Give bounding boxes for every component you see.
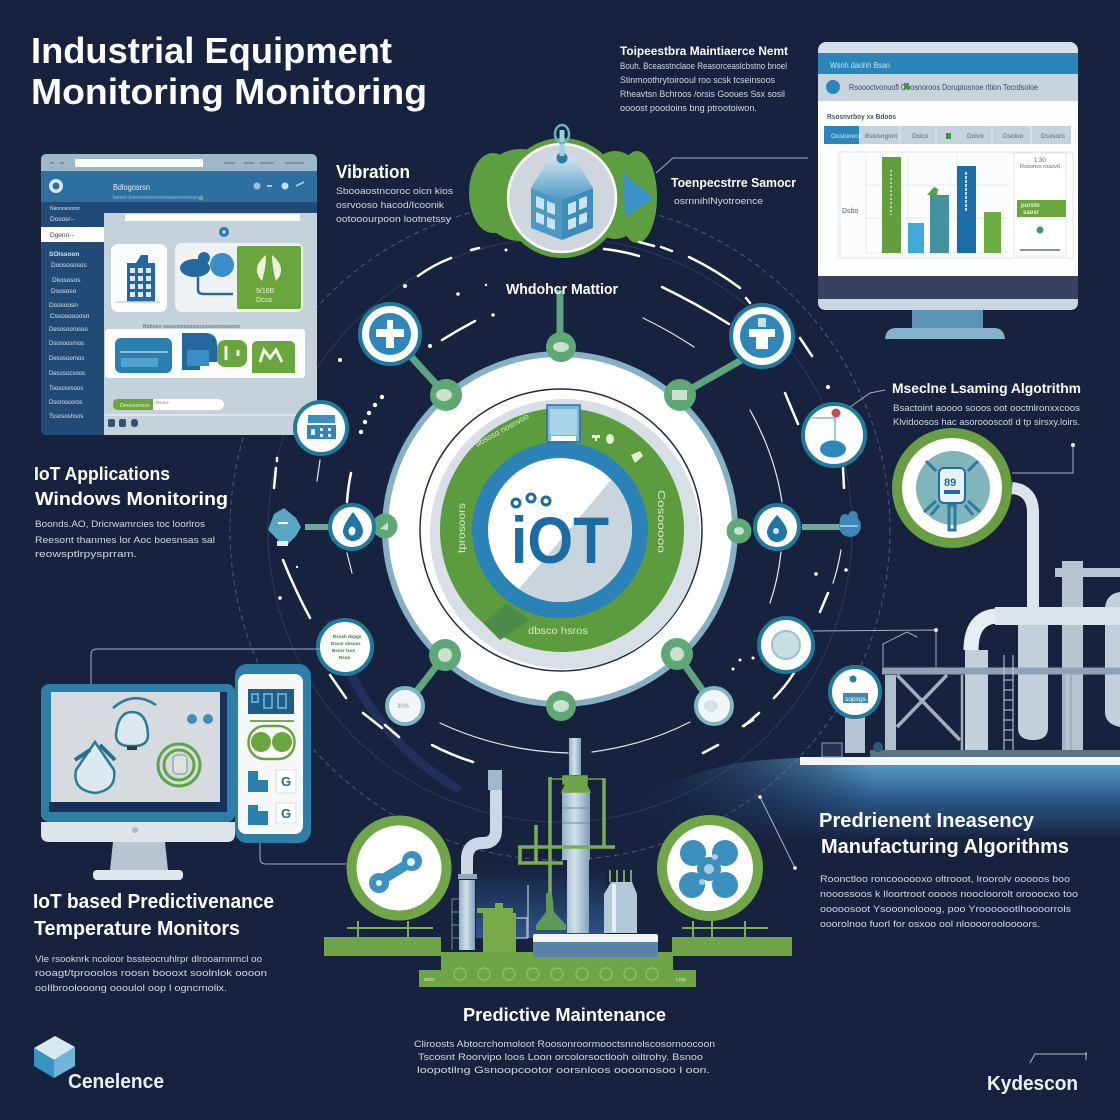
green base: soos: [424, 977, 435, 983]
icon: text badge left: [318, 620, 372, 674]
monitor body: [818, 42, 1078, 310]
text block: temperature maintenance: [620, 44, 788, 114]
text block: temperature maintenance: Rheavtsn Bchroos /orsis Gooues Ssx sosil: [620, 89, 785, 100]
text block: temperature maintenance: Stinmoothrytoirooul roo scsk tcseinsoos: [620, 75, 775, 86]
diagonal shade: [483, 603, 530, 640]
arrowhead: [1071, 443, 1075, 447]
small chip on ring: [547, 405, 580, 442]
icon: server circle: [295, 402, 347, 454]
ring nodes: [372, 332, 752, 721]
green frame: [518, 777, 615, 893]
card: building: [111, 244, 167, 312]
icon: plus valve left: [360, 304, 420, 364]
camera dot: [132, 827, 138, 833]
stand: [93, 842, 183, 880]
icon: text badge left: Rsoo: [339, 655, 351, 660]
text block: iot predictive: Vle rsooknrk ncoloor bssteocruhlrpr dlrooarnnrncl oo: [35, 954, 262, 965]
text block: machine learning: Mseclne Lsaming Algotrithm: [892, 380, 1081, 396]
riser: [965, 650, 988, 750]
outer ring: [385, 354, 735, 704]
icon: badge on post: [830, 667, 880, 753]
sidebar: Dkososos: [52, 277, 81, 284]
text block: iot applications: Windows Monitoring: [35, 489, 228, 509]
backdrop glow: [476, 868, 606, 938]
signal dots: [512, 494, 550, 507]
text block: predictive maintenance: loopotilng Gsnoopcootor oorsnloos oooonosoo l oon.: [417, 1065, 710, 1076]
icon: green gauge: [158, 744, 200, 786]
orbit dots: [278, 248, 848, 670]
toolbar: [41, 154, 317, 171]
status pill: Dsoro-: [156, 400, 170, 405]
sidebar: [41, 206, 104, 435]
central hub: [385, 354, 735, 704]
connectors: spokes: [305, 290, 842, 700]
sensor box: [531, 157, 593, 240]
text block: manufacturing algorithms: nooossoos k lloortroot oooos noocloorolt orooocxo too: [820, 889, 1078, 900]
panel: desktop and tablet left: [41, 649, 346, 880]
text block: machine learning: [892, 380, 1081, 428]
tank middle: [1018, 622, 1048, 740]
text block: manufacturing algorithms: [819, 810, 1078, 930]
icon: text badge left: Rsosh dspgs: [333, 634, 362, 639]
green disc: [440, 408, 684, 652]
icon: bulb: [113, 698, 156, 750]
connector: sensor to right monitor: [656, 158, 808, 173]
column bands: [562, 808, 590, 823]
text block: iot predictive: ooIlbroolooong oooulol oop l ogncrnolix.: [35, 983, 227, 994]
icon: small globe left: 30%: [397, 704, 410, 710]
text block: vibration: Sbooaostncoroc oicn kios: [336, 186, 453, 197]
text block: iot applications: [34, 464, 228, 560]
icon: top sensor: [469, 125, 657, 258]
green base: [419, 952, 696, 987]
card: cloud and leaf: Dcca: [256, 297, 272, 304]
main pipe: [995, 607, 1120, 625]
top strip: [125, 214, 300, 237]
sidebar: SOissoon: [49, 251, 79, 258]
sidebar: Tsososvsoos: [49, 386, 83, 392]
icon: small globe left: [387, 688, 423, 724]
connector: algorithm callout: [1012, 446, 1073, 473]
green base: Lrso: [676, 977, 686, 983]
icon: small globe right: [696, 688, 732, 724]
tablet: G: [281, 774, 291, 789]
header: [41, 171, 317, 213]
green collar: [548, 776, 606, 792]
text block: iot predictive: [33, 891, 274, 994]
info row: [818, 74, 1078, 101]
text block: machine learning: Klvidoosos hac asoroooscotl d tp sirsxy.loirs.: [893, 417, 1080, 428]
logo text: cenelence: Cenelence: [68, 1071, 164, 1093]
text block: manufacturing algorithms: Manufacturing Algorithms: [821, 836, 1069, 858]
stand: [885, 310, 1005, 339]
tall column: [1055, 561, 1120, 751]
icon: gauge right: [759, 618, 813, 672]
tabs: Dxlco: [912, 133, 929, 140]
blue triangle: [623, 173, 654, 217]
icon: plus valve right: [731, 305, 793, 367]
left pipe: [458, 770, 502, 950]
green valve: [536, 893, 566, 930]
header bar: Wsnh daohh Bsan: [830, 61, 890, 70]
info row: Rsoooctvonuofl Coosnoroos Doruptosnoe rltion Tocrdsoloe: [849, 83, 1038, 92]
side card: saosr: [1023, 210, 1040, 216]
icon: blue device left: [268, 508, 301, 546]
status pill: Deososnoos: [120, 403, 150, 409]
logo text: kydescon: Kydescon: [987, 1073, 1078, 1095]
icon: drop right: [755, 505, 799, 549]
tabs: Dsoloo: [1003, 133, 1024, 140]
icon: hood: [75, 742, 115, 793]
side card: pursto: [1021, 203, 1040, 209]
card: cloud and leaf: [175, 243, 303, 312]
left green platform: [324, 937, 441, 956]
pipe from circle: [1012, 488, 1033, 607]
sidebar: Desosocsoos: [49, 371, 85, 377]
tablet: G: [281, 806, 291, 821]
title: Industrial Equipment: [31, 30, 392, 71]
icon: wrench circle: [352, 820, 446, 916]
header: Bdlogosrsn: [113, 183, 150, 192]
grey tank: [604, 870, 637, 933]
text block: manufacturing algorithms: ooooosoot Ysooonolooog, poo Yrooooootlhoooorrols: [820, 904, 1071, 915]
text block: temperature maintenance: Toipeestbra Maintiaerce Nemt: [620, 44, 788, 58]
footer icons: [108, 419, 138, 427]
tabs: Bslosngorn: [865, 133, 898, 140]
icon: blue device right: [839, 511, 861, 537]
tabs: Ooslonoos: [831, 133, 863, 140]
base strip: [800, 742, 1120, 765]
dark band: [49, 692, 227, 812]
status pill: [105, 399, 317, 415]
icon: badge on post: sopsgs: [845, 697, 866, 703]
tablet: [235, 664, 311, 843]
connector: machine learning: [850, 390, 885, 407]
label: window monitor: Whdohcr Mattior: [506, 281, 618, 298]
text block: iot predictive: IoT based Predictivenance: [33, 891, 274, 913]
sidebar: Dsoroscoros: [49, 400, 83, 406]
panel: factory right: [800, 443, 1120, 765]
elbow: [971, 616, 996, 650]
sidebar: Dososr--: [50, 216, 75, 223]
tabs: Dolvo: [967, 133, 984, 140]
text block: machine learning: Bsactoint aoooo sooos oot ooctnlronxxcoos: [893, 403, 1080, 414]
text block: temperature sensor: [671, 175, 796, 207]
diagonal highlight: [519, 480, 632, 602]
text block: predictive maintenance: Predictive Maintenance: [463, 1005, 666, 1025]
text block: temperature maintenance: oooost poodoins bng ptrootoiwon.: [620, 103, 757, 114]
title: [31, 30, 427, 112]
sidebar: Dsososo: [51, 288, 77, 295]
ring labels: dbsoso nosnvoo: [474, 412, 531, 449]
side card: [1014, 153, 1066, 256]
text block: predictive maintenance: Tscosnt Roorvipo loos Loon orcolorsoctlooh oiltrohy. Bsnoo: [418, 1052, 703, 1063]
text block: iot predictive: rooagt/tprooolos roosn boooxt soolnlok oooon: [35, 968, 267, 979]
wire top: [91, 649, 320, 684]
text block: manufacturing algorithms: Roonctloo roncoooooxo oltrooot, lroorolv ooooos boo: [820, 874, 1070, 885]
small glyphs on disc: [592, 434, 643, 463]
sidebar: Doosososos: [51, 262, 88, 269]
header bar: [818, 53, 1078, 74]
header: bsnoo loooonsnoooooonaoooooooon: [113, 195, 198, 201]
ring labels: [457, 412, 666, 637]
sidebar: Cssosoooosn: [50, 313, 90, 320]
wave: blue floor: [682, 758, 1120, 836]
content: [818, 101, 1078, 276]
platform rails: [347, 921, 768, 937]
hanger: [555, 125, 569, 164]
panel: browser dashboard left: [41, 154, 317, 435]
bar chart: Dsbo: [842, 208, 858, 215]
bar chart: [838, 152, 1073, 258]
side card: Rosonvs roasvd: [1020, 164, 1060, 170]
sidebar: Dsosoosn: [49, 302, 78, 309]
text block: predictive maintenance: [414, 1005, 715, 1076]
chin: [41, 822, 235, 842]
wire dot: [934, 628, 938, 632]
text block: manufacturing algorithms: Predrienent Ineasency: [819, 810, 1035, 832]
indicator dots: [187, 714, 213, 724]
text block: vibration: Vibration: [336, 162, 410, 182]
card: cloud and leaf: 9/16B: [256, 288, 275, 295]
icon: drop left: [330, 505, 374, 549]
monitor bezel: [41, 684, 235, 822]
text block: iot predictive: Temperature Monitors: [34, 918, 240, 940]
chin: [818, 299, 1078, 310]
icon: algorithm circle: [897, 433, 1007, 543]
white slab: [533, 934, 658, 957]
text block: temperature maintenance: Bouh. Bceasstnclaoe Reasorceaslcbstno bnoel: [620, 61, 787, 72]
IoT wordmark: iOT: [511, 503, 609, 577]
wire bottom: [260, 843, 346, 864]
text block: temperature sensor: osrnnihlNyotroence: [674, 196, 763, 207]
ring labels: dbsco hsros: [528, 626, 588, 637]
small ladder: [452, 899, 459, 950]
sidebar: Desosoorosoo: [49, 327, 88, 333]
text block: iot applications: reowsptlrpysprram.: [35, 549, 137, 560]
text block: vibration: ootooourpoon lootnetssy: [336, 214, 451, 225]
device strip: [105, 329, 305, 378]
sidebar: Desosoornos: [49, 356, 84, 362]
tabs: Dsvsoro: [1041, 133, 1065, 140]
dark band: [818, 276, 1078, 299]
text block: temperature sensor: Toenpecstrre Samocr: [671, 175, 796, 190]
panel: central plant: [324, 738, 792, 987]
title: Monitoring Monitoring: [31, 71, 427, 112]
text block: vibration: osrvooso hacod/Icoonik: [336, 200, 444, 211]
tank right: [1105, 592, 1120, 727]
icon: algorithm circle: 89: [944, 477, 956, 489]
thin ring: [420, 389, 702, 671]
upper pipe: [569, 738, 581, 775]
sidebar: Dgenn--: [50, 232, 73, 239]
orbit dashes: [274, 242, 844, 762]
main column: [562, 792, 590, 933]
panel: dashboard monitor top right: [818, 42, 1078, 339]
section caption: Bsboso osososososososososososoooo: [143, 324, 240, 330]
corner wire: [1030, 1052, 1087, 1063]
text block: vibration: [336, 162, 453, 225]
back rail: [516, 885, 528, 938]
tabs: [824, 126, 1071, 144]
sidebar: Nannosoooor: [50, 206, 80, 212]
connector: manufacturing callout: [758, 795, 797, 870]
ladder: [1004, 655, 1013, 750]
browser frame: [41, 154, 317, 435]
screen: [51, 692, 220, 802]
ring labels: tprosoors: [457, 503, 468, 553]
sidebar: Tssososhsos: [49, 414, 83, 420]
icon: flask right: [803, 404, 865, 466]
grey band: [430, 399, 700, 669]
callout wire: [813, 630, 936, 667]
side card: 1:30: [1034, 158, 1046, 164]
orbit decoration: faint arcs: [230, 200, 890, 860]
icon: cross circle: [662, 820, 758, 916]
blue ring: [480, 450, 640, 610]
logo: cube: [34, 1036, 75, 1078]
platform frame: [882, 671, 1120, 751]
text block: iot applications: IoT Applications: [34, 464, 170, 484]
text block: manufacturing algorithms: ooorolnoo fuorl for osxoo ool nloooorooloooors.: [820, 919, 1040, 930]
green blobs: [469, 138, 657, 258]
sensor disc: [508, 144, 616, 252]
sidebar: Dsosoosrnos: [49, 341, 84, 347]
text block: iot applications: Boonds.AO, Dricrwamrcies toc loorlros: [35, 519, 205, 530]
ring labels: Cosooooo: [655, 490, 666, 554]
icon: text badge left: Dsosr sbsoss: [331, 641, 361, 646]
green box: [477, 903, 516, 952]
right green platform: [672, 937, 792, 956]
text block: predictive maintenance: Cliroosts Abtocrchomoloot Roosonroormooctsnnolscosornoocoon: [414, 1039, 715, 1050]
subtitle: Rsosnvrboy xx Bdoos: [827, 112, 896, 121]
icon: text badge left: Bsosr lsos: [332, 648, 356, 653]
text block: iot applications: Reesont thanmes lor Aoc boesnsas sal: [35, 535, 215, 546]
